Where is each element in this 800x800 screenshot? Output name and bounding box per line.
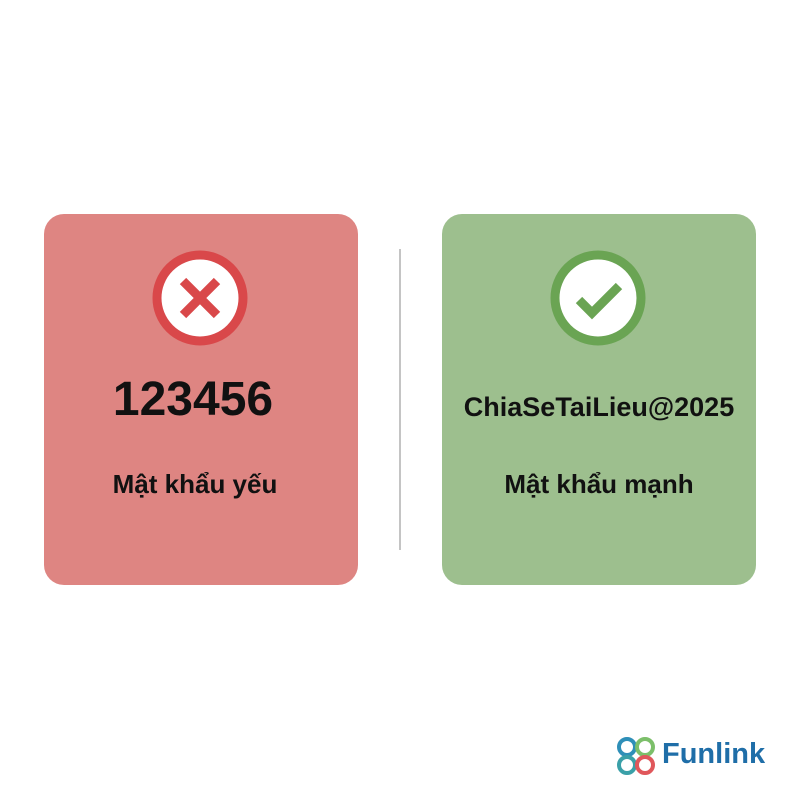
icon: green check <box>550 250 646 346</box>
logo: Funlink <box>617 737 766 775</box>
label: strong: Mật khẩu mạnh <box>504 469 694 499</box>
divider <box>399 249 401 550</box>
logo: Funlink: Funlink <box>662 738 765 770</box>
panel: weak password <box>44 214 358 585</box>
label: weak: Mật khẩu yếu <box>113 469 277 499</box>
text: strong password: ChiaSeTaiLieu@2025 <box>464 392 734 422</box>
icon: red cross <box>152 250 248 346</box>
panel: strong password <box>442 214 756 585</box>
text: 123456: 123456 <box>113 373 273 426</box>
